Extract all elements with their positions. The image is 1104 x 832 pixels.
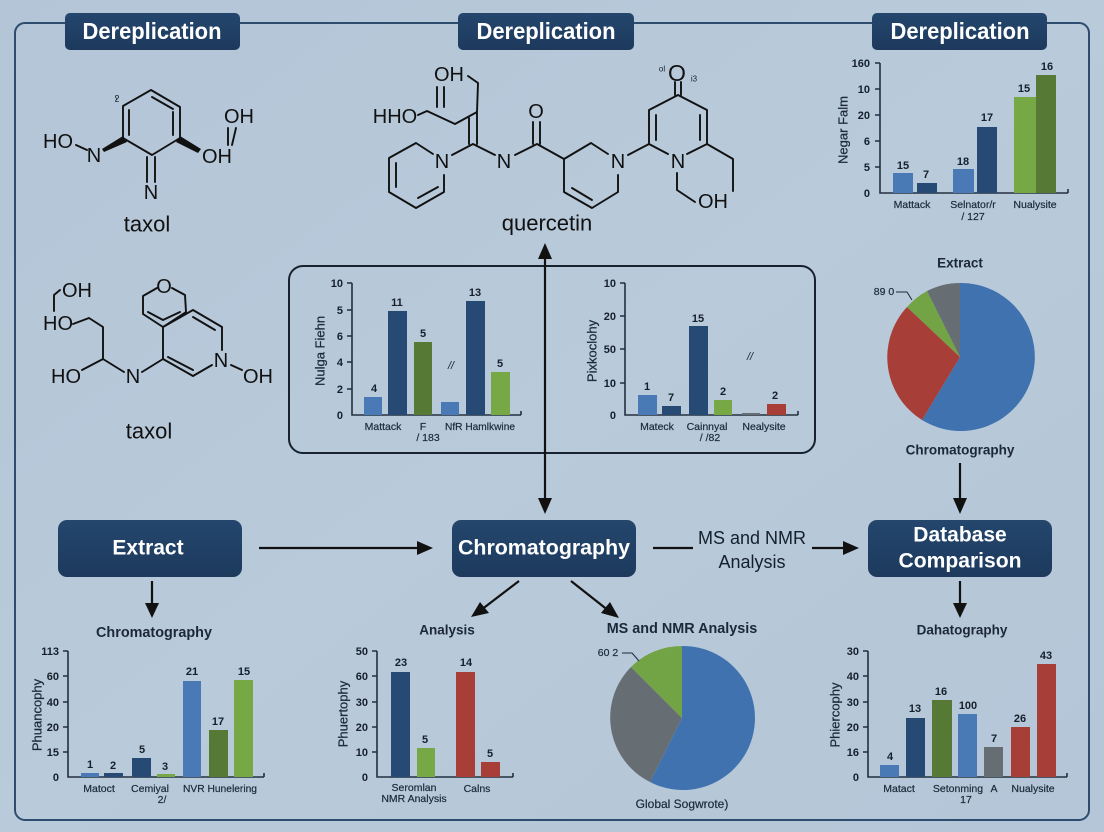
bar chart: inner right: 2 — [720, 386, 726, 398]
process box: Database Comparison — [868, 520, 1052, 577]
molecule: quercetin: O — [668, 60, 686, 86]
molecule: quercetin — [373, 60, 733, 236]
bar chart: bottom left — [30, 625, 264, 806]
bar chart: bottom right: 4 — [887, 751, 894, 763]
bar chart: bottom right: Setonming — [933, 783, 983, 795]
bar chart: bottom right: 26 — [1014, 713, 1026, 725]
chart title: MS and NMR Analysis: MS and NMR Analysis — [607, 621, 757, 637]
bar chart: bottom middle: Phuertophy — [336, 680, 350, 747]
pie chart: right: 89 0 — [874, 286, 894, 298]
bar chart: top right: 15 — [1018, 83, 1030, 95]
bar chart: inner left: 6 — [337, 331, 343, 343]
chart title: Analysis: Analysis — [419, 622, 475, 638]
label: MS and NMR Analysis: MS and NMR — [698, 528, 806, 548]
bar chart: bottom middle: 23 — [395, 657, 407, 669]
pie chart: right — [874, 256, 1035, 458]
bar chart: top right: Negar Falm — [836, 96, 850, 164]
bar chart: bottom right: 0 — [853, 772, 859, 784]
bar chart: top right: 0 — [864, 188, 870, 200]
molecule: taxol top: N — [144, 182, 158, 204]
bar chart: inner left: F — [420, 421, 426, 433]
bar chart: inner right: 0 — [610, 410, 616, 422]
molecule: taxol lower: N — [214, 350, 228, 372]
bar chart: inner right — [584, 278, 798, 444]
bar chart: bottom left: 5 — [139, 744, 145, 756]
bar chart: inner right: 2 — [772, 390, 778, 402]
bar chart: bottom right: Phiercophy — [828, 682, 842, 748]
arrow: extract to chromatography — [259, 541, 433, 555]
bar chart: inner right: 50 — [604, 344, 616, 356]
arrow: MS and NMR to database — [812, 541, 859, 555]
molecule: quercetin: HHO — [373, 106, 417, 128]
bar chart: inner right: 10 — [604, 378, 616, 390]
bar chart: bottom right: 7 — [991, 733, 997, 745]
bar chart: inner left: 11 — [391, 297, 403, 309]
bar chart: bottom left: 21 — [186, 666, 198, 678]
bar chart: top right: 18 — [957, 156, 969, 168]
chart title: Chromatography: Chromatography — [96, 625, 212, 641]
bar chart: bottom middle: 0 — [362, 772, 368, 784]
molecule: taxol lower: OH — [243, 366, 273, 388]
process box: Extract — [58, 520, 242, 577]
label: MS and NMR Analysis: Analysis — [718, 552, 786, 572]
bar chart: inner left — [312, 278, 521, 444]
bar chart: bottom right: 40 — [847, 671, 859, 683]
arrow: database down — [953, 581, 967, 618]
bar chart: inner left: 13 — [469, 287, 481, 299]
bar chart: bottom left: 17 — [212, 716, 224, 728]
bar chart: bottom right: 43 — [1040, 650, 1052, 662]
bar chart: inner right: / /82 — [700, 432, 720, 444]
bar chart: bottom left: 2 — [110, 760, 116, 772]
bar chart: bottom left: 60 — [47, 671, 59, 683]
bar chart: bottom middle: 60 — [356, 671, 368, 683]
label: MS and NMR Analysis — [698, 528, 806, 572]
bar chart: bottom middle: Calns — [464, 783, 490, 795]
pie chart: right: Chromatography — [906, 442, 1015, 458]
bar chart: inner left: 4 — [337, 357, 344, 369]
bar chart: bottom middle: NMR Analysis — [381, 793, 447, 805]
bar chart: bottom right: 17 — [960, 794, 972, 806]
molecule: quercetin: N — [497, 151, 511, 173]
bar chart: bottom left: 2/ — [158, 794, 166, 806]
bar chart: top right: 7 — [923, 169, 929, 181]
molecule: quercetin: i3 — [691, 74, 698, 84]
arrow: chromatography to analysis — [471, 581, 519, 617]
molecule: taxol lower: O — [156, 276, 172, 298]
bar chart: top right: Selnator/r — [950, 199, 996, 211]
arrow: vertical double-headed — [538, 243, 552, 514]
pie chart: bottom middle: 60 2 — [598, 647, 618, 659]
bar chart: inner right: 10 — [604, 278, 616, 290]
molecule: taxol lower — [43, 276, 273, 444]
bar chart: bottom right: 13 — [909, 703, 921, 715]
molecule: taxol top: OH — [224, 106, 254, 128]
bar chart: top right: Mattack — [894, 199, 931, 211]
bar chart: bottom middle: 10 — [356, 747, 368, 759]
bar chart: bottom left: 15 — [238, 666, 250, 678]
bar chart: bottom left: 3 — [162, 761, 168, 773]
bar chart: top right: 6 — [864, 136, 870, 148]
bar chart: bottom left: Phuancophy — [30, 678, 44, 751]
heading: Dereplication right — [872, 13, 1047, 50]
bar chart: bottom middle: 50 — [356, 646, 368, 658]
bar chart: top right: 10 — [858, 84, 870, 96]
bar chart: bottom left: 113 — [41, 646, 59, 658]
bar chart: top right: 17 — [981, 112, 993, 124]
bar chart: top right: 15 — [897, 160, 909, 172]
bar chart: inner right: 7 — [668, 392, 674, 404]
bar chart: bottom left: Matoct — [83, 783, 115, 795]
process box: Chromatography — [452, 520, 636, 577]
bar chart: bottom left: NVR Hunelering — [183, 783, 257, 795]
heading: Dereplication centre: Dereplication — [476, 18, 616, 44]
arrow: chromatography to MS and NMR — [653, 547, 693, 549]
bar chart: top right: / 127 — [961, 211, 985, 223]
process box: Database Comparison: Database — [913, 524, 1007, 546]
bar chart: bottom right: 30 — [847, 697, 859, 709]
bar chart: bottom right: 20 — [847, 722, 859, 734]
bar chart: inner left: Mattack — [365, 421, 402, 433]
process box: Chromatography: Chromatography — [458, 536, 630, 560]
molecule: taxol top — [43, 90, 254, 236]
molecule: quercetin: OH — [434, 64, 464, 86]
bar chart: inner left: 5 — [337, 305, 343, 317]
bar chart: bottom middle: 14 — [460, 657, 473, 669]
molecule: taxol lower: N — [126, 366, 140, 388]
bar chart: inner left: / 183 — [416, 432, 440, 444]
bar chart: bottom right: 100 — [959, 700, 977, 712]
molecule: quercetin: O — [528, 101, 544, 123]
bar chart: bottom left: 40 — [47, 697, 59, 709]
caption: taxol: taxol — [124, 212, 170, 236]
bar chart: bottom right: 16 — [847, 747, 859, 759]
bar chart: inner right: Pixkoclohy — [584, 319, 600, 382]
bar chart: inner right: 1 — [644, 381, 650, 393]
bar chart: inner right: // — [746, 351, 754, 363]
bar chart: bottom left: 20 — [47, 722, 59, 734]
bar chart: bottom right: Nualysite — [1011, 783, 1055, 795]
inner panel: paired bar charts — [289, 266, 815, 453]
bar chart: top right: 16 — [1041, 61, 1053, 73]
bar chart: inner left: NfR Hamlkwine — [445, 421, 515, 433]
molecule: quercetin: OH — [698, 191, 728, 213]
bar chart: top right: Nualysite — [1013, 199, 1057, 211]
molecule: taxol lower: HO — [51, 366, 81, 388]
bar chart: bottom middle: Seromlan — [392, 782, 437, 794]
process box: Extract: Extract — [112, 536, 184, 560]
bar chart: inner left: 0 — [337, 410, 343, 422]
arrow: extract down — [145, 581, 159, 618]
chart title: Extract: Extract — [937, 256, 983, 270]
molecule: taxol top: OH — [202, 146, 232, 168]
bar chart: inner left: 10 — [331, 278, 343, 290]
bar chart: inner left: 5 — [497, 358, 503, 370]
bar chart: top right: 160 — [852, 58, 870, 70]
bar chart: inner right: Mateck — [640, 421, 675, 433]
heading: Dereplication left — [65, 13, 240, 50]
heading: Dereplication centre — [458, 13, 634, 50]
bar chart: bottom right — [828, 622, 1067, 806]
bar chart: inner left: Nulga Fiehn — [312, 316, 328, 386]
bar chart: top right: 5 — [864, 162, 870, 174]
bar chart: bottom right: A — [990, 783, 998, 795]
molecule: taxol lower: HO — [43, 313, 73, 335]
pie chart: bottom middle — [598, 621, 757, 811]
caption: quercetin: quercetin — [502, 210, 592, 236]
bar chart: bottom middle: 5 — [487, 748, 493, 760]
bar chart: inner right: Cainnyal — [687, 421, 727, 433]
bar chart: inner right: 15 — [692, 313, 704, 325]
heading: Dereplication left: Dereplication — [82, 18, 222, 44]
bar chart: top right — [836, 58, 1068, 223]
bar chart: inner right: 20 — [604, 311, 616, 323]
bar chart: bottom right: 30 — [847, 646, 859, 658]
bar chart: bottom middle: 20 — [356, 722, 368, 734]
bar chart: bottom left: 0 — [53, 772, 59, 784]
bar chart: bottom right: Matact — [883, 783, 915, 795]
arrow: chromatography to database (right) — [953, 463, 967, 514]
bar chart: bottom middle: 5 — [422, 734, 428, 746]
molecule: quercetin: N — [671, 151, 685, 173]
bar chart: bottom left: 1 — [87, 759, 93, 771]
arrow: chromatography to MS pie — [571, 581, 619, 618]
process box: Database Comparison: Comparison — [898, 550, 1022, 572]
bar chart: inner right: Nealysite — [742, 421, 786, 433]
bar chart: bottom middle — [336, 622, 513, 805]
bar chart: bottom right: 16 — [935, 686, 947, 698]
bar chart: inner left: 4 — [371, 383, 378, 395]
molecule: taxol lower: OH — [62, 280, 92, 302]
caption: taxol lower: taxol — [126, 418, 172, 444]
molecule: taxol top: HO — [43, 131, 73, 153]
bar chart: inner left: 2 — [337, 384, 343, 396]
molecule: taxol top: ջ — [114, 92, 120, 102]
molecule: quercetin: ol — [659, 64, 665, 74]
pie chart: bottom middle: Global Sogwrote) — [636, 797, 728, 811]
heading: Dereplication right: Dereplication — [890, 18, 1030, 44]
bar chart: bottom left: 15 — [47, 747, 59, 759]
molecule: quercetin: N — [611, 151, 625, 173]
bar chart: top right: 20 — [858, 110, 870, 122]
bar chart: bottom middle: 30 — [356, 697, 368, 709]
molecule: taxol top: N — [87, 145, 101, 167]
bar chart: inner left: 5 — [420, 328, 426, 340]
bar chart: inner left: // — [447, 360, 455, 372]
molecule: quercetin: N — [435, 151, 449, 173]
chart title: Dahatography: Dahatography — [917, 622, 1008, 638]
bar chart: bottom left: Cemiyal — [131, 783, 169, 795]
